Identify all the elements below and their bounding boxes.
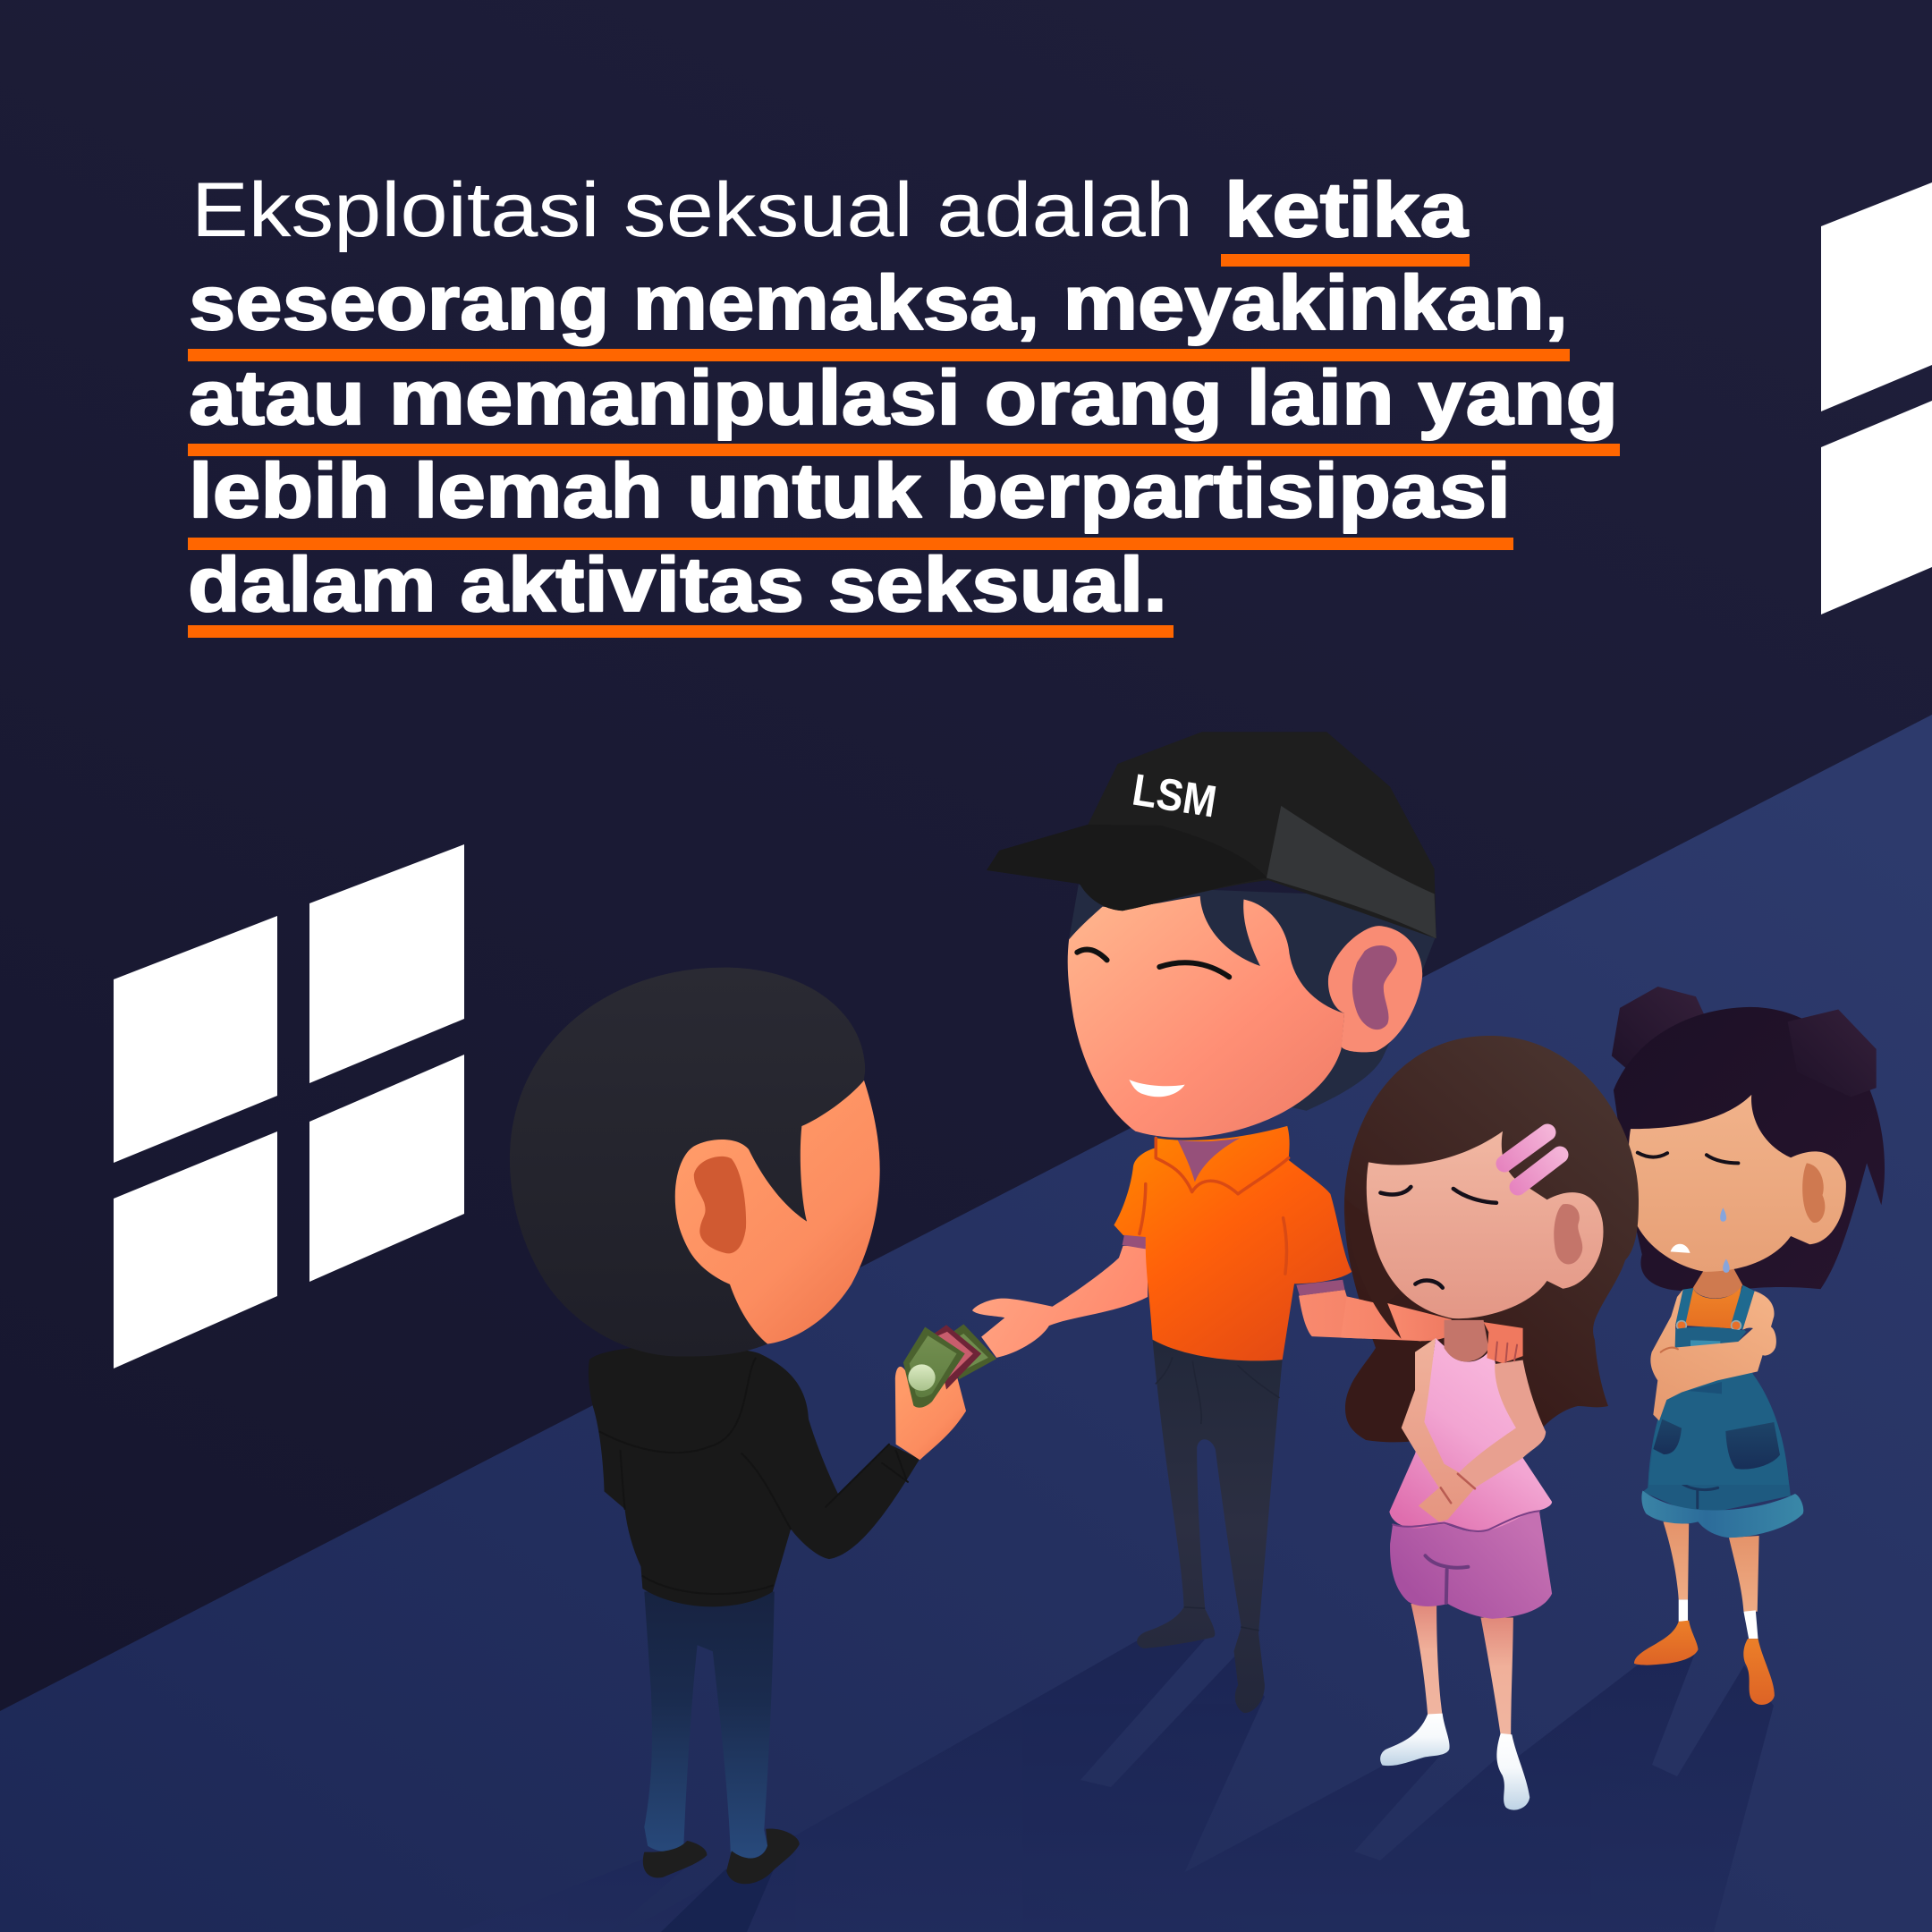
- hoodie man hand: [895, 1367, 966, 1460]
- line 1: Eksploitasi seksual adalah: [191, 167, 1193, 253]
- floor shadows: [456, 1640, 1774, 1932]
- man cap: [987, 732, 1436, 938]
- hoodie man hair: [510, 968, 880, 1356]
- right window: [1821, 182, 1932, 614]
- overalls girl crossed arms: [1650, 1290, 1776, 1420]
- pink girl arms: [1402, 1338, 1475, 1521]
- left window: [114, 844, 464, 1368]
- overalls girl lower body: [1641, 1330, 1803, 1538]
- character: man in orange shirt: [972, 732, 1453, 1713]
- pink girl hair back: [1344, 1036, 1639, 1442]
- man legs: [1137, 1340, 1283, 1713]
- man forearm over hair: [1341, 1297, 1453, 1341]
- man eyes: [1077, 950, 1229, 977]
- man arm reaching: [972, 1246, 1148, 1358]
- line 2: seseorang memaksa, meyakinkan,: [189, 260, 1568, 346]
- LSM cap label: LSM: [1129, 765, 1220, 827]
- man ear: [1328, 926, 1422, 1052]
- floor: [0, 715, 1932, 1932]
- line 1: ketika: [1224, 167, 1469, 253]
- man arm on shoulder: [1299, 1290, 1453, 1341]
- character: girl in pink top: [1341, 1036, 1639, 1810]
- hoodie man jeans: [589, 1346, 966, 1884]
- man hand on shoulder: [1484, 1322, 1523, 1363]
- pink girl hair strand: [1345, 1199, 1451, 1341]
- man orange shirt: [1114, 1126, 1352, 1360]
- overalls girl hair and buns: [1612, 987, 1885, 1291]
- hoodie man inner ear: [694, 1157, 746, 1253]
- overalls girl legs and shoes: [1634, 1521, 1775, 1705]
- man head: [987, 732, 1436, 1138]
- line 4: lebih lemah untuk berpartisipasi: [189, 448, 1511, 534]
- hoodie man face: [675, 1080, 880, 1343]
- hoodie man shoes: [643, 1841, 707, 1877]
- line 3: atau memanipulasi orang lain yang: [189, 355, 1618, 441]
- character: man in black hoodie: [510, 968, 996, 1884]
- pink girl legs and socks: [1380, 1604, 1530, 1810]
- pink girl body: [1389, 1320, 1552, 1619]
- man inner ear: [1352, 945, 1397, 1030]
- character: girl in overalls: [1612, 987, 1885, 1705]
- line 1: [191, 167, 1470, 267]
- man hair back: [1069, 885, 1436, 1111]
- pink girl face: [1367, 1131, 1604, 1318]
- overalls girl torso: [1648, 1268, 1789, 1485]
- tears: [1720, 1208, 1730, 1273]
- overalls girl face: [1629, 1095, 1846, 1273]
- icon: banknotes: [903, 1324, 996, 1408]
- line 5: dalam aktivitas seksual.: [188, 542, 1167, 628]
- title text: [188, 167, 1620, 638]
- man smile: [1129, 1080, 1185, 1097]
- hoodie: [589, 1346, 919, 1606]
- hair clips: [1504, 1132, 1560, 1187]
